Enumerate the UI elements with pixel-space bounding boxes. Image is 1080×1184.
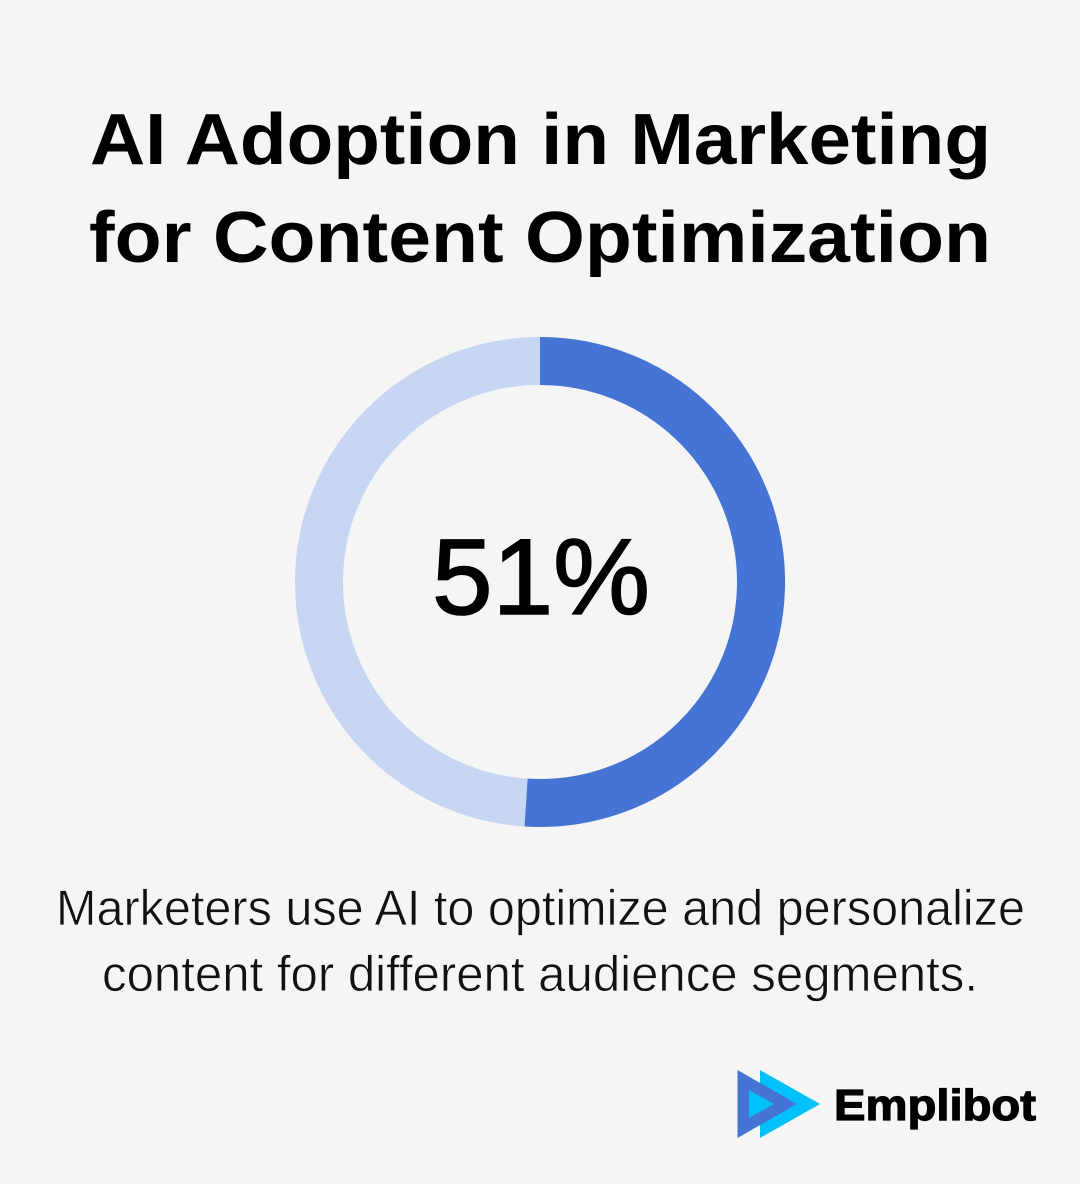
- description text: Marketers use AI to optimize and personalize: [56, 880, 1025, 936]
- logo: Emplibot: Emplibot: [834, 1081, 1036, 1130]
- title: for Content Optimization: [89, 198, 991, 278]
- title: [89, 100, 991, 278]
- logo: Emplibot: [738, 1070, 1036, 1138]
- description text: [56, 880, 1025, 1002]
- donut chart: 51%: [319, 361, 761, 803]
- title: AI Adoption in Marketing: [90, 100, 991, 180]
- description text: content for different audience segments.: [102, 946, 978, 1002]
- center value: 51%: [432, 516, 650, 637]
